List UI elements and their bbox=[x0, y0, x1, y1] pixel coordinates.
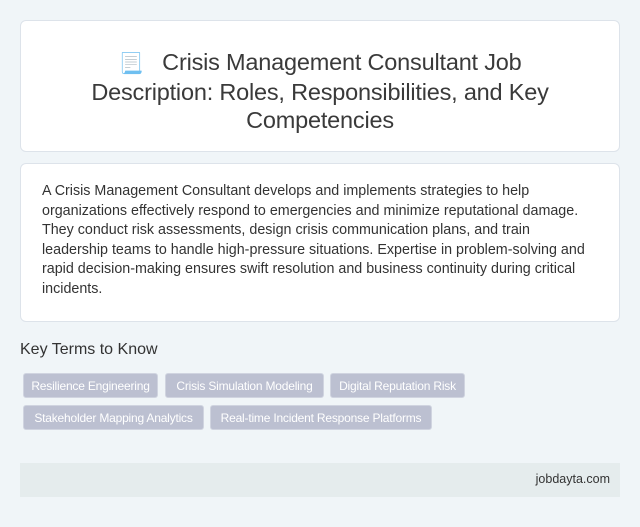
key terms tags: Stakeholder Mapping Analytics bbox=[34, 411, 193, 425]
description text: leadership teams to handle high-pressure situations. Expertise in problem-solving and bbox=[42, 242, 585, 258]
key terms heading: Key Terms to Know bbox=[20, 341, 158, 358]
title bbox=[91, 49, 549, 133]
description text: incidents. bbox=[42, 281, 102, 297]
description text: rapid decision-making ensures swift resolution and business continuity during critical bbox=[42, 261, 575, 277]
key terms tags: Crisis Simulation Modeling bbox=[176, 379, 313, 393]
key terms tags: Resilience Engineering bbox=[31, 379, 150, 393]
description text: They conduct risk assessments, design crisis communication plans, and train bbox=[42, 222, 530, 238]
header panel bbox=[20, 20, 620, 152]
key terms tags: Digital Reputation Risk bbox=[339, 379, 456, 393]
footer text: jobdayta.com bbox=[536, 472, 610, 486]
description text: organizations effectively respond to emergencies and minimize reputational damage. bbox=[42, 203, 578, 219]
title: Competencies bbox=[246, 107, 394, 133]
key terms tags bbox=[23, 373, 465, 430]
key terms tags: Real-time Incident Response Platforms bbox=[221, 411, 421, 425]
footer bbox=[20, 463, 620, 497]
title: Description: Roles, Responsibilities, and Key bbox=[91, 79, 549, 105]
description text: A Crisis Management Consultant develops and implements strategies to help bbox=[42, 183, 529, 199]
title: 📃 Crisis Management Consultant Job bbox=[118, 49, 522, 75]
description panel bbox=[20, 163, 620, 322]
description text bbox=[42, 183, 585, 297]
